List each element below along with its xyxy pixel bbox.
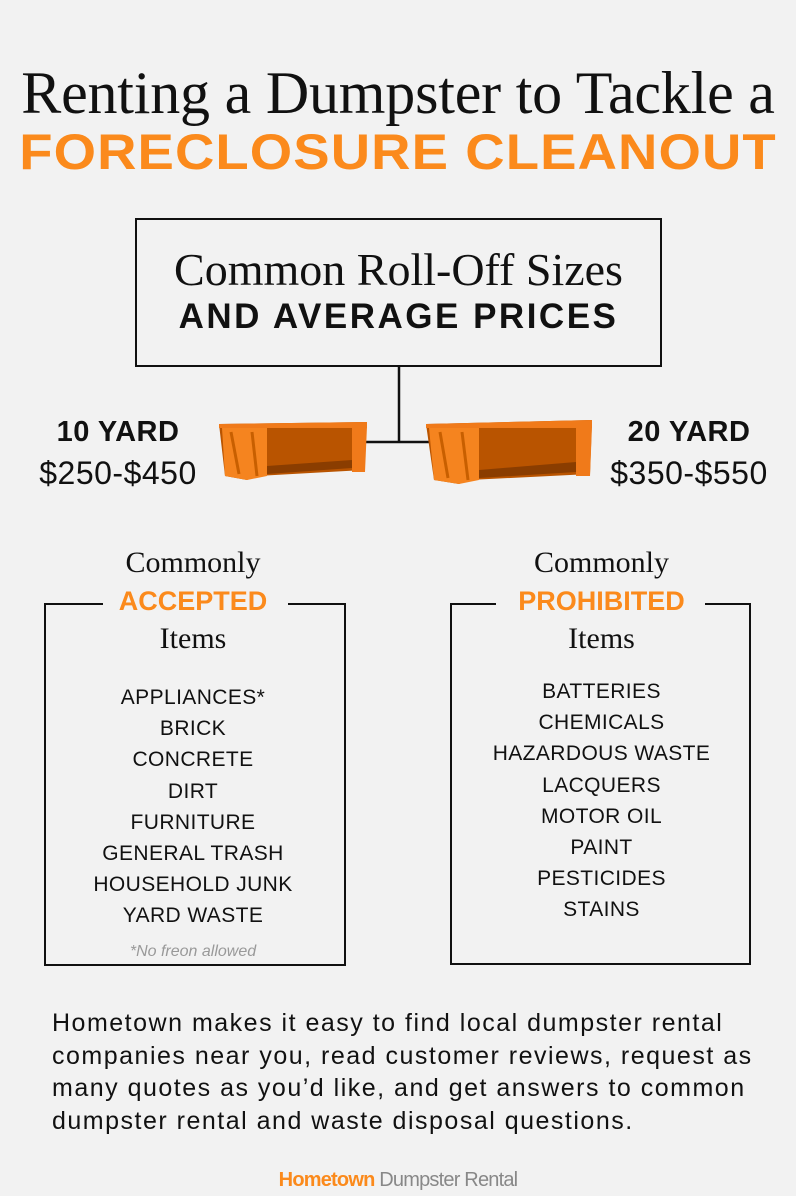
heading: commonly accepted items <box>119 546 267 655</box>
connector lines <box>366 367 429 444</box>
text block: about Hometown: Hometown makes it easy to find local dumpster rental <box>52 1009 723 1037</box>
heading: commonly accepted items: ACCEPTED <box>119 586 267 616</box>
panel: prohibited <box>450 546 751 965</box>
list: accepted items: GENERAL TRASH <box>102 842 284 865</box>
heading: commonly accepted items: Items <box>160 622 226 655</box>
list: accepted items: YARD WASTE <box>123 904 263 927</box>
box: sizes heading: AND AVERAGE PRICES <box>179 297 618 336</box>
list: prohibited items <box>493 680 710 921</box>
list: prohibited items: PAINT <box>570 836 633 859</box>
heading: commonly accepted items: Commonly <box>125 546 260 579</box>
label: 10 yard price: $250-$450 <box>39 455 197 491</box>
box: sizes heading: Common Roll-Off Sizes <box>174 244 623 295</box>
list: accepted items: FURNITURE <box>131 811 255 834</box>
panel: accepted <box>44 546 346 966</box>
text block: about Hometown: many quotes as you’d like, and get answers to common <box>52 1074 746 1102</box>
label: 10 yard price <box>39 416 197 491</box>
box: sizes heading <box>135 218 662 367</box>
list: prohibited items: MOTOR OIL <box>541 805 662 828</box>
list: accepted items <box>93 686 293 927</box>
heading: commonly prohibited items: PROHIBITED <box>518 586 685 616</box>
list: accepted items: DIRT <box>168 780 218 803</box>
title: Renting a Dumpster to Tackle a <box>21 60 775 126</box>
label: 20 yard price: $350-$550 <box>610 455 768 491</box>
heading: commonly prohibited items: Commonly <box>534 546 669 579</box>
label: 10 yard price: 10 YARD <box>57 416 179 448</box>
list: prohibited items: BATTERIES <box>542 680 661 703</box>
icon: dumpster 10 yard <box>219 422 367 480</box>
list: prohibited items: PESTICIDES <box>537 867 666 890</box>
text block: about Hometown: companies near you, read customer reviews, request as <box>52 1042 753 1070</box>
list: prohibited items: LACQUERS <box>542 774 661 797</box>
label: 20 yard price <box>610 416 768 491</box>
list: accepted items: BRICK <box>160 717 226 740</box>
heading: commonly prohibited items: Items <box>568 622 635 655</box>
footnote: *No freon allowed <box>130 943 256 960</box>
label: 20 yard price: 20 YARD <box>628 416 750 448</box>
text block: about Hometown: dumpster rental and waste disposal questions. <box>52 1106 634 1134</box>
logo: Hometown Dumpster Rental <box>279 1169 517 1191</box>
icon: dumpster 20 yard <box>426 420 592 484</box>
list: prohibited items: STAINS <box>563 898 640 921</box>
list: prohibited items: CHEMICALS <box>538 711 665 734</box>
text block: about Hometown <box>52 1009 753 1134</box>
title <box>19 60 777 180</box>
title: FORECLOSURE CLEANOUT <box>19 124 777 180</box>
list: accepted items: APPLIANCES* <box>121 686 265 709</box>
list: accepted items: CONCRETE <box>132 748 254 771</box>
list: prohibited items: HAZARDOUS WASTE <box>493 742 710 765</box>
heading: commonly prohibited items <box>518 546 685 655</box>
list: accepted items: HOUSEHOLD JUNK <box>93 873 293 896</box>
